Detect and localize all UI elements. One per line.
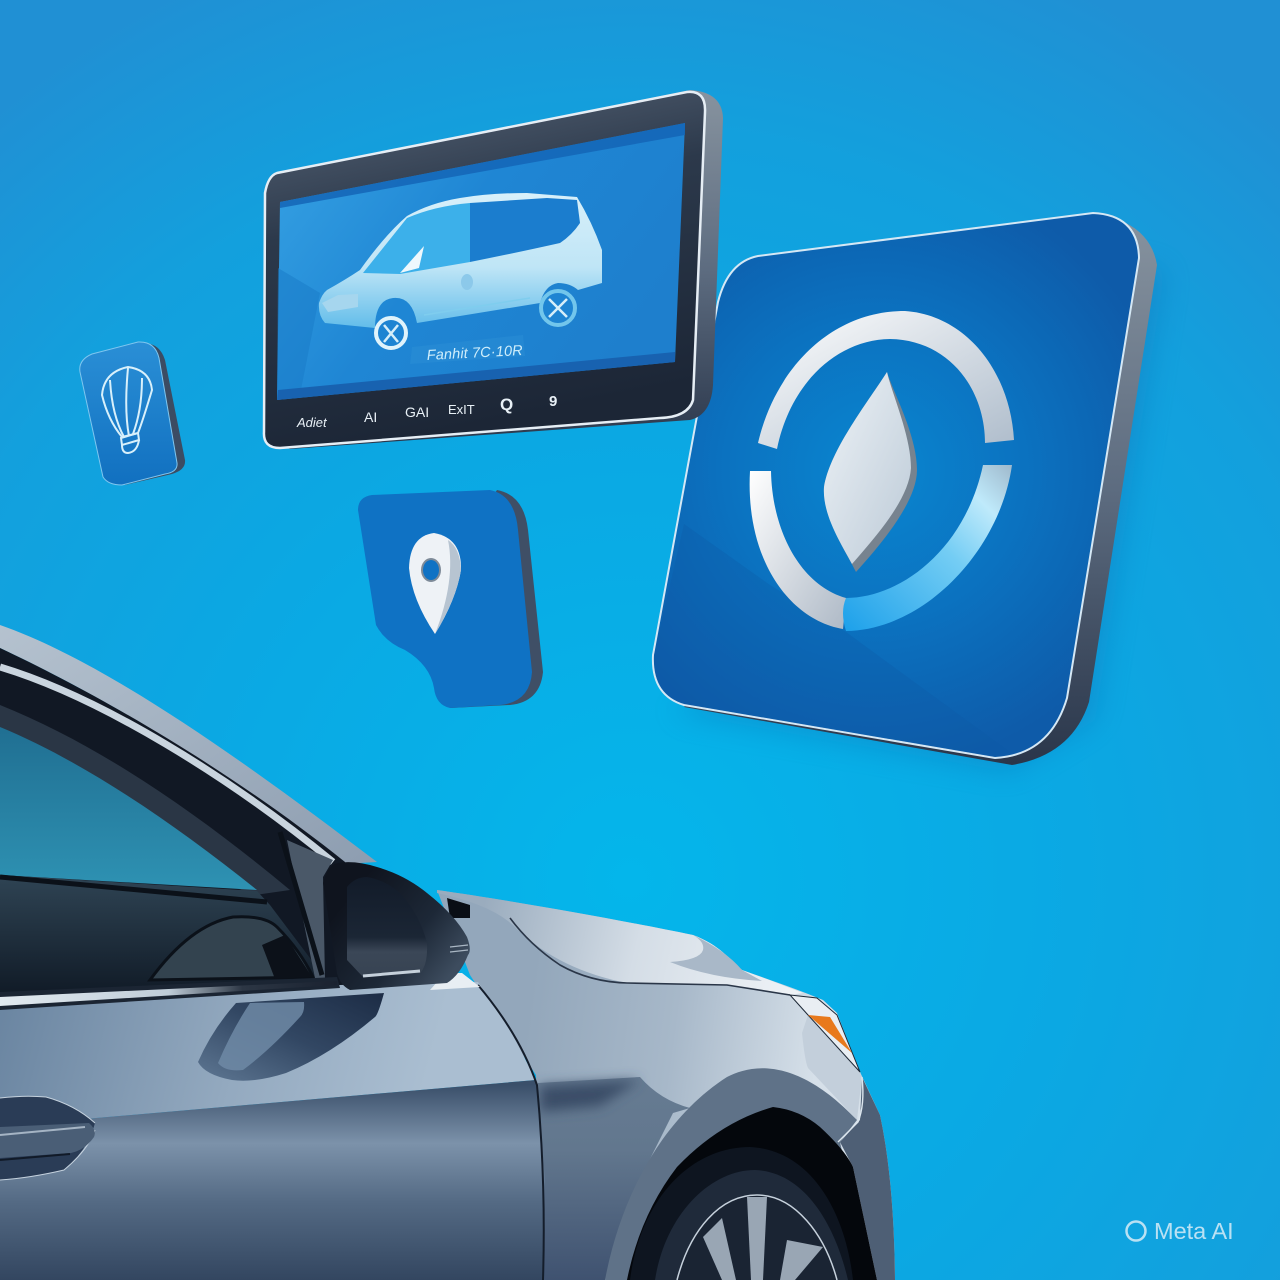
A pillar <box>287 840 333 980</box>
panel: lightbulb tile <box>80 342 185 485</box>
door interior <box>0 875 325 996</box>
button labels: Adiet <box>296 415 328 430</box>
icon: compass ring <box>750 311 1014 631</box>
button labels: GAI <box>405 404 429 420</box>
icon: light bulb <box>102 367 152 453</box>
panel: location pin tile <box>358 490 543 708</box>
fender <box>437 890 895 1280</box>
panel: dashboard screen <box>264 90 723 449</box>
label: screen readout: Fanhit 7C·10R <box>426 343 524 364</box>
van wheels <box>376 291 575 348</box>
door upper body <box>0 982 536 1128</box>
icon: map pin <box>409 533 461 634</box>
button labels <box>296 393 557 430</box>
button labels: ExIT <box>448 402 475 417</box>
button labels: Q <box>500 395 513 414</box>
icon: diamond needle <box>824 372 917 572</box>
wheel well <box>627 1107 877 1280</box>
front wheel <box>630 1147 853 1280</box>
door handle <box>0 1096 95 1180</box>
roof band <box>0 625 377 864</box>
panel: compass tile <box>653 213 1165 772</box>
headlight <box>790 995 860 1072</box>
button labels: AI <box>364 409 377 425</box>
icon: van on screen <box>319 193 602 348</box>
car shape <box>0 625 895 1280</box>
wing mirror <box>323 862 470 990</box>
wheel arch lip <box>605 1068 870 1280</box>
screen display <box>277 123 685 400</box>
watermark: Meta AI <box>1154 1218 1234 1244</box>
hood <box>437 890 803 995</box>
chrome belt line <box>0 977 340 1010</box>
button labels: 9 <box>549 393 557 410</box>
side window glass <box>0 727 257 890</box>
door seam <box>478 985 544 1280</box>
chrome strip <box>0 667 333 862</box>
door lower body <box>0 1080 545 1280</box>
fender crease shadow <box>540 1080 640 1112</box>
wheel spokes <box>703 1197 823 1280</box>
window frame <box>0 648 345 1010</box>
label: screen readout <box>410 335 525 364</box>
rear body <box>840 1077 895 1280</box>
fender lower <box>538 1077 690 1280</box>
mirror reflection on door <box>198 993 384 1081</box>
